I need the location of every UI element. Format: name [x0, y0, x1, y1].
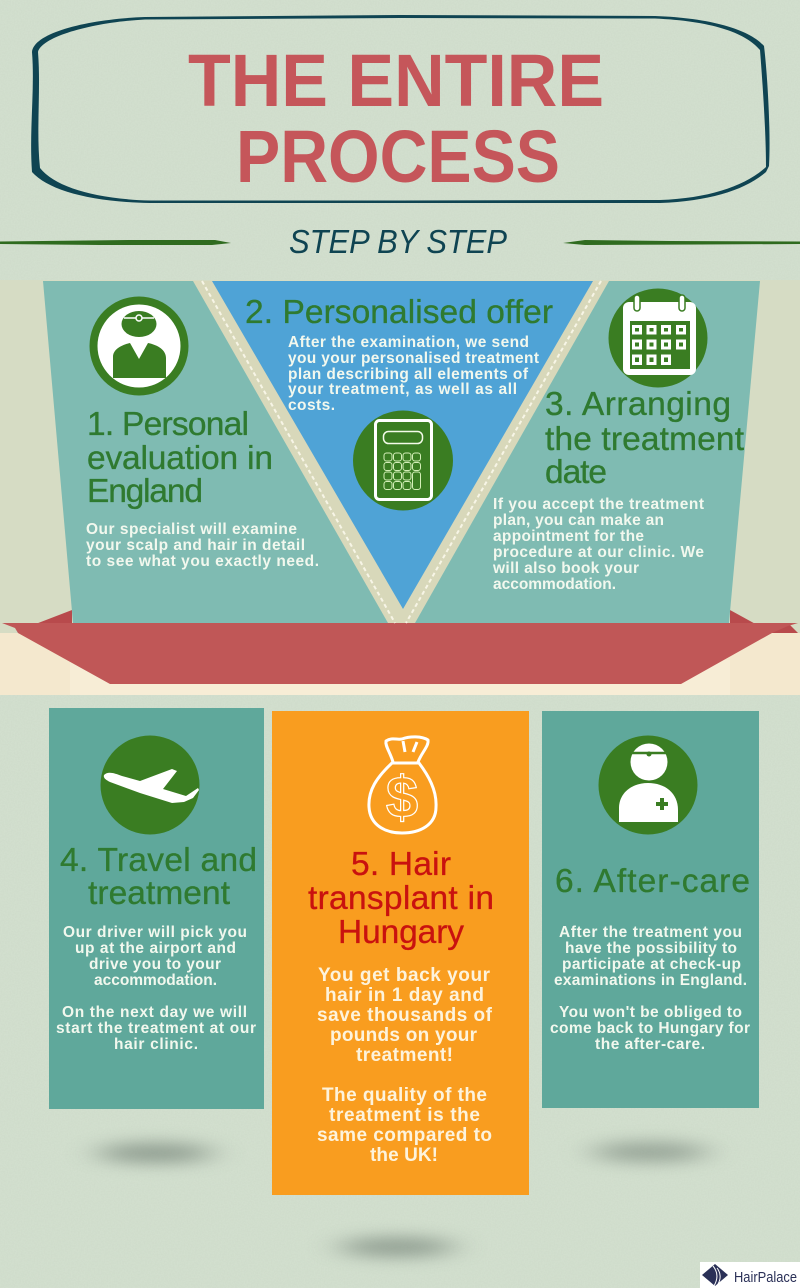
text: save thousands of	[317, 1005, 493, 1026]
icon: nurse	[598, 736, 698, 834]
heading	[308, 846, 494, 951]
heading: the treatment	[545, 421, 745, 458]
text: the after-care.	[595, 1036, 705, 1053]
panel: step 3	[415, 281, 760, 623]
text: Our specialist will examine	[86, 521, 297, 538]
backdrop band	[0, 280, 800, 695]
heading: transplant in	[308, 880, 494, 917]
text: hair in 1 day and	[325, 985, 484, 1006]
text: costs.	[288, 397, 335, 414]
panel: step 1	[43, 281, 388, 623]
text	[492, 496, 704, 593]
heading: Hungary	[338, 914, 464, 951]
text: participate at check-up	[562, 956, 741, 973]
right divider stroke	[563, 240, 800, 245]
heading: 6. After-care	[555, 863, 750, 900]
text: You get back your	[318, 965, 491, 986]
text: treatment!	[356, 1045, 453, 1066]
text	[550, 924, 750, 1053]
text: The quality of the	[322, 1085, 487, 1106]
logo	[700, 1262, 800, 1288]
icon: calculator	[353, 410, 453, 510]
text: drive you to your	[89, 956, 221, 973]
text: appointment for the	[493, 528, 644, 545]
icon: airplane	[100, 736, 200, 834]
text	[86, 521, 319, 570]
heading: 2. Personalised offer	[245, 294, 553, 331]
text: the UK!	[370, 1145, 438, 1166]
heading: 3. Arranging	[545, 386, 731, 423]
text: up at the airport and	[75, 940, 236, 957]
title: PROCESS	[236, 115, 560, 198]
title frame	[31, 15, 770, 203]
text: hair clinic.	[114, 1036, 198, 1053]
ribbon	[2, 610, 798, 684]
icon: doctor	[90, 296, 188, 396]
text: your scalp and hair in detail	[86, 537, 305, 554]
icon: calendar	[608, 288, 708, 388]
text: you your personalised treatment	[288, 350, 539, 367]
panel: step 5	[272, 711, 529, 1195]
subtitle: STEP BY STEP	[289, 223, 507, 260]
text	[56, 924, 256, 1053]
panel: step 2	[212, 281, 593, 609]
icon: money bag	[369, 737, 436, 833]
text: On the next day we will	[62, 1004, 247, 1021]
icon: money bag: $	[386, 765, 418, 830]
left divider stroke	[0, 240, 231, 245]
panel: step 6	[542, 711, 759, 1108]
heading: 4. Travel and	[60, 842, 257, 879]
text: come back to Hungary for	[550, 1020, 750, 1037]
text: your treatment, as well as all	[288, 381, 517, 398]
text: plan, you can make an	[493, 512, 664, 529]
heading	[545, 386, 745, 491]
panel: step 4	[49, 708, 264, 1109]
shadow: step 6	[592, 1142, 708, 1162]
text: If you accept the treatment	[493, 496, 704, 513]
heading: 1. Personal	[87, 406, 249, 443]
text: plan describing all elements of	[288, 366, 529, 383]
text	[288, 334, 539, 414]
heading: 5. Hair	[351, 846, 451, 883]
text: pounds on your	[330, 1025, 478, 1046]
heading: date	[545, 454, 607, 491]
text: will also book your	[492, 560, 639, 577]
heading	[60, 842, 257, 912]
text: accommodation.	[94, 972, 217, 989]
text: examinations in England.	[554, 972, 747, 989]
title: THE ENTIRE	[188, 39, 604, 122]
shadow: step 4	[97, 1143, 213, 1163]
text: After the examination, we send	[288, 334, 529, 351]
heading: treatment	[88, 875, 231, 912]
text: have the possibility to	[565, 940, 737, 957]
text: You won't be obliged to	[559, 1004, 742, 1021]
text: Our driver will pick you	[63, 924, 247, 941]
text: After the treatment you	[559, 924, 742, 941]
text: procedure at our clinic. We	[493, 544, 704, 561]
stitched strips	[193, 281, 609, 623]
text: same compared to	[317, 1125, 492, 1146]
text: to see what you exactly need.	[86, 553, 319, 570]
text	[317, 965, 493, 1166]
text: start the treatment at our	[56, 1020, 256, 1037]
heading: England	[87, 473, 203, 510]
text: accommodation.	[493, 576, 616, 593]
heading	[87, 406, 273, 510]
shadow: step 5	[339, 1237, 455, 1257]
title	[188, 39, 604, 198]
heading: evaluation in	[87, 440, 273, 477]
text: treatment is the	[329, 1105, 480, 1126]
